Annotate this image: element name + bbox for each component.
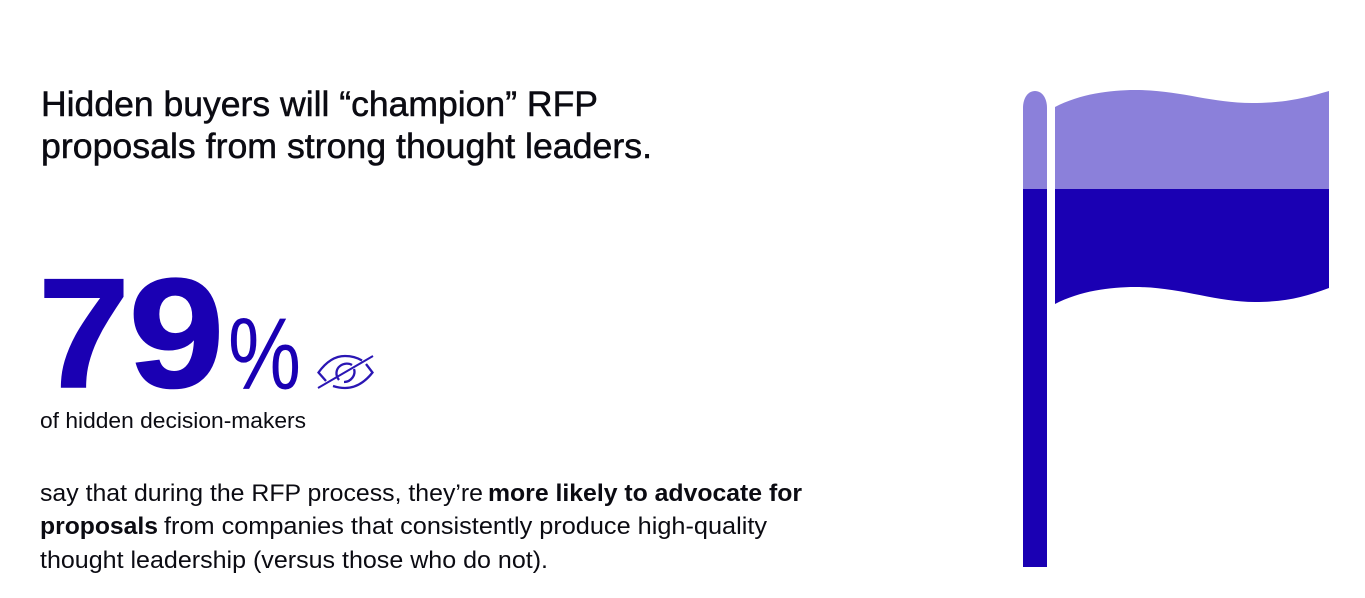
title: Hidden buyers will “champion” RFP [41, 85, 598, 124]
body text: more likely to advocate for [488, 480, 802, 507]
statistic: 79 percent: % [228, 297, 301, 411]
icon: flag [1023, 90, 1329, 567]
body text [40, 480, 802, 574]
icon: crossed-out eye [318, 356, 373, 388]
statistic: 79 percent: 9 [128, 247, 224, 421]
title: proposals from strong thought leaders. [41, 127, 652, 166]
statistic: 79 percent: 7 [38, 247, 130, 421]
body text: proposals [40, 513, 158, 540]
body text: from companies that consistently produce high-quality [164, 513, 768, 540]
statistic caption: of hidden decision-makers [40, 408, 306, 433]
flag pole [1023, 91, 1047, 567]
flag cloth [1055, 90, 1329, 304]
body text: say that during the RFP process, they’re [40, 480, 483, 507]
title [41, 85, 652, 166]
statistic: 79 percent [38, 247, 301, 421]
body text: thought leadership (versus those who do not). [40, 547, 548, 574]
